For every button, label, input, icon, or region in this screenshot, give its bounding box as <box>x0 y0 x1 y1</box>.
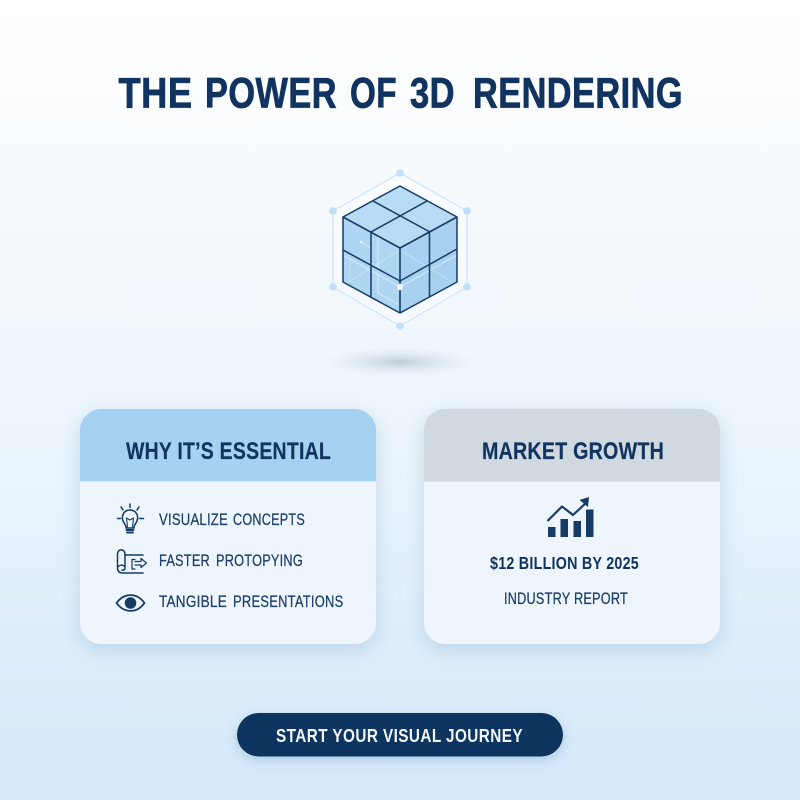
title: OF <box>350 70 397 118</box>
icon: 3D cube with hexagon frame <box>329 169 471 330</box>
button: call to action <box>237 713 563 756</box>
icon: blueprint <box>118 550 146 573</box>
panel header <box>80 409 376 482</box>
button label: START YOUR VISUAL JOURNEY <box>276 726 523 746</box>
cube inner light lines <box>343 237 457 304</box>
list item text: PRESENTATIONS <box>233 592 344 611</box>
list item text: VISUALIZE <box>159 510 228 529</box>
icon: growth chart <box>548 497 594 537</box>
heading: MARKET GROWTH <box>482 438 664 465</box>
list item text <box>159 510 305 529</box>
panel header <box>424 409 720 482</box>
title: RENDERING <box>473 70 683 118</box>
list item text <box>159 551 303 570</box>
icon: eye <box>116 595 144 611</box>
list item text: CONCEPTS <box>233 510 305 529</box>
cube ground shadow <box>322 347 478 377</box>
source text: INDUSTRY REPORT <box>504 589 628 608</box>
list item text: FASTER <box>159 551 210 570</box>
panel: why it's essential <box>80 409 376 644</box>
heading: WHY IT’S ESSENTIAL <box>126 438 331 465</box>
cube grid lines <box>343 186 457 313</box>
title: 3D <box>410 70 455 118</box>
title: THE <box>118 70 192 118</box>
icon: light bulb <box>118 504 144 532</box>
cube faces <box>343 186 457 313</box>
title: POWER <box>205 70 337 118</box>
list item text: TANGIBLE <box>159 592 227 611</box>
hexagon frame <box>329 169 471 330</box>
list item text <box>159 592 344 611</box>
title <box>118 70 683 118</box>
panel: market growth <box>424 409 720 644</box>
list item text: PROTOPYING <box>216 551 303 570</box>
market value: $12 BILLION BY 2025 <box>490 553 639 573</box>
